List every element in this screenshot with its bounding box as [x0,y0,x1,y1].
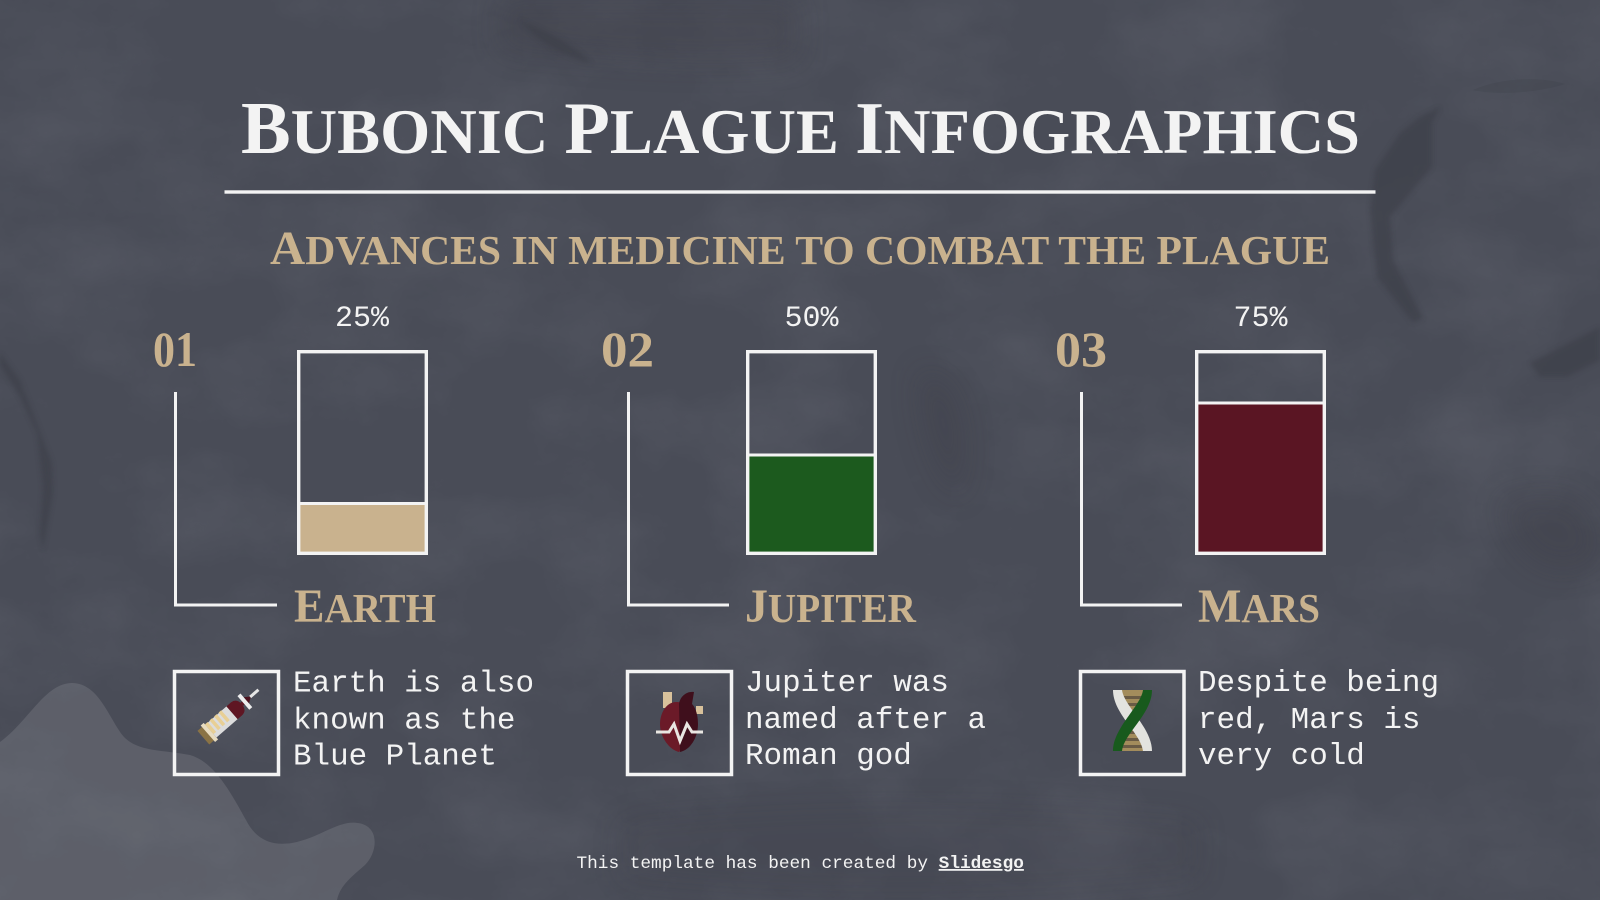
heading Mars: MARS [1198,580,1320,633]
percent label: 25% [335,302,390,336]
decorative blob bottom left [0,683,375,900]
icon box: heart [628,672,732,774]
description Mars: very cold [1198,739,1365,774]
panel: Jupiter [601,302,986,774]
bracket line [176,392,277,605]
description Earth: known as the [293,704,515,738]
description Mars: red, Mars is [1198,703,1420,738]
percent label: 50% [784,302,839,336]
bar chart: 50% [748,352,875,554]
panel: Earth [153,302,534,774]
footer credit: This template has been created by Slidesgo [576,854,1024,874]
description Jupiter: named after a [745,703,986,738]
bracket line [628,392,729,605]
bar chart: 25% [299,352,426,554]
number 02: 02 [601,321,654,377]
heading Jupiter: JUPITER [745,580,916,633]
title: BUBONIC PLAGUE INFOGRAPHICS [241,88,1360,170]
description Mars: Despite being [1198,666,1439,701]
description Jupiter: Roman god [745,739,912,774]
description Earth: Earth is also [293,666,534,702]
number 03: 03 [1055,321,1107,377]
bracket line [1082,392,1182,605]
percent label: 75% [1233,302,1288,336]
title underline [224,190,1376,194]
number 01: 01 [153,321,197,377]
icon box: syringe [174,672,278,774]
subtitle: ADVANCES IN MEDICINE TO COMBAT THE PLAGUE [270,222,1330,275]
description Jupiter: Jupiter was [745,666,949,701]
bar chart: 75% [1197,352,1324,554]
panel: Mars [1055,302,1439,774]
icon box: DNA [1080,672,1184,774]
description Earth: Blue Planet [293,740,497,774]
heading Earth: EARTH [294,580,436,633]
